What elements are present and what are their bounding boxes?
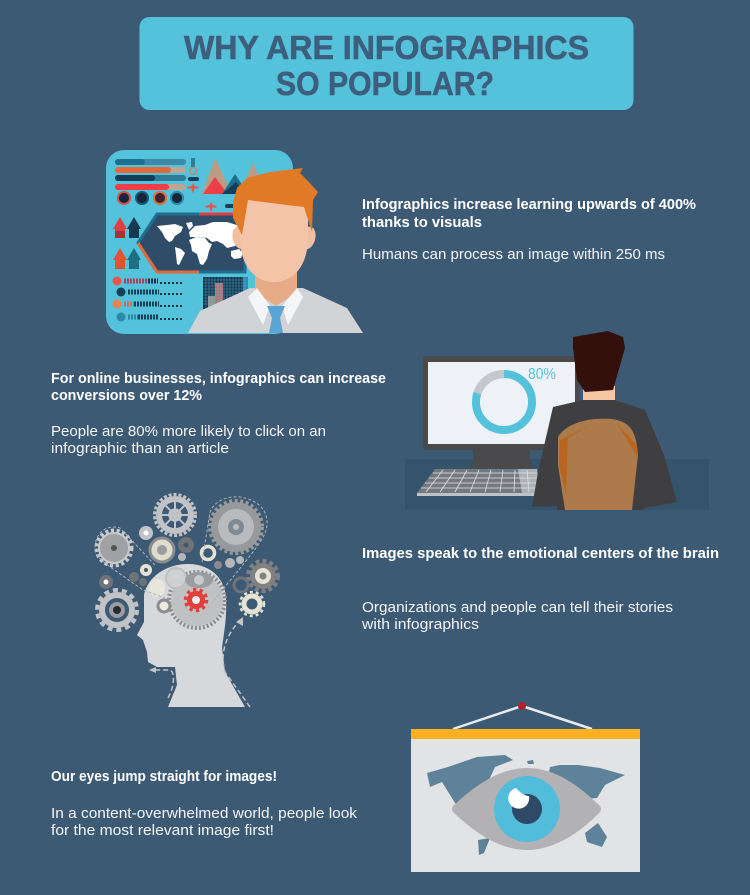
shirt [188,288,363,333]
world map [427,755,625,855]
title banner: SO POPULAR? [276,65,494,102]
pictogram rows [112,276,184,322]
text block 4 [51,769,358,839]
gear top right [210,501,262,553]
hand [640,470,648,491]
donut chart 80% [476,366,556,430]
house arrows [113,217,141,269]
small scattered gears [99,526,248,592]
hair [233,168,318,235]
text block 3: Organizations and people can tell their stories [362,599,673,616]
pin [518,702,526,710]
stand [470,450,533,468]
text block 3: Images speak to the emotional centers of the brain [362,546,719,562]
chair [558,419,638,510]
text block 2 [51,371,386,457]
donut chart 80%: 80% [528,366,556,383]
illustration: eye on world map poster [411,702,640,872]
tie [267,306,285,333]
mountain chart [202,158,266,194]
top band [411,729,640,739]
monitor [423,356,580,450]
donut dials [118,192,183,204]
desk [405,459,709,510]
keyboard [417,469,540,496]
hair [573,331,625,392]
text block 3 [361,546,719,633]
gear lower right [240,592,264,616]
highlight [508,788,529,809]
title banner [140,17,634,110]
iris [494,776,560,842]
text block 1: Humans can process an image within 250 ms [362,246,665,263]
neck [255,258,297,306]
text block 4: for the most relevant image first! [51,822,274,839]
text block 1: Infographics increase learning upwards of 400% [362,197,696,213]
text block 3: with infographics [361,616,479,633]
text block 4: Our eyes jump straight for images! [51,769,277,785]
large brain gear [169,572,225,628]
collar [248,288,303,325]
gear left spoked [97,531,131,565]
text block 1: thanks to visuals [362,215,482,231]
illustration: person at computer [405,331,709,510]
head silhouette [137,564,245,707]
red centre gear [186,590,206,610]
gear middle left [150,538,174,562]
text block 4: In a content-overwhelmed world, people look [51,805,358,822]
small plane and car icons [206,202,235,212]
neck [583,386,615,400]
gear top centre [154,494,196,536]
hanging strings [453,706,592,729]
hexagon world map screen [138,214,245,272]
jacket and arms [532,400,677,510]
illustration: head with gears [95,494,278,707]
illustration: man with data dashboard [106,150,363,334]
text block 2: For online businesses, infographics can increase [51,371,386,387]
face [240,195,308,282]
white world map [157,222,243,265]
gear right [248,561,278,591]
text block 1 [362,197,696,263]
progress bars [115,158,199,192]
small brain gears [149,568,213,612]
title banner: WHY ARE INFOGRAPHICS [184,29,589,66]
pupil [512,794,542,824]
ears [232,227,316,249]
text block 2: infographic than an article [51,440,229,457]
dashed connector belts [95,497,267,608]
dashed arrows [155,620,250,707]
text block 2: conversions over 12% [51,388,202,404]
text block 2: People are 80% more likely to click on an [51,423,326,440]
gear lower left large [97,590,137,630]
board [411,729,640,872]
eye lens [452,768,601,850]
dot grid chart [203,277,248,309]
arrowheads [149,617,243,673]
